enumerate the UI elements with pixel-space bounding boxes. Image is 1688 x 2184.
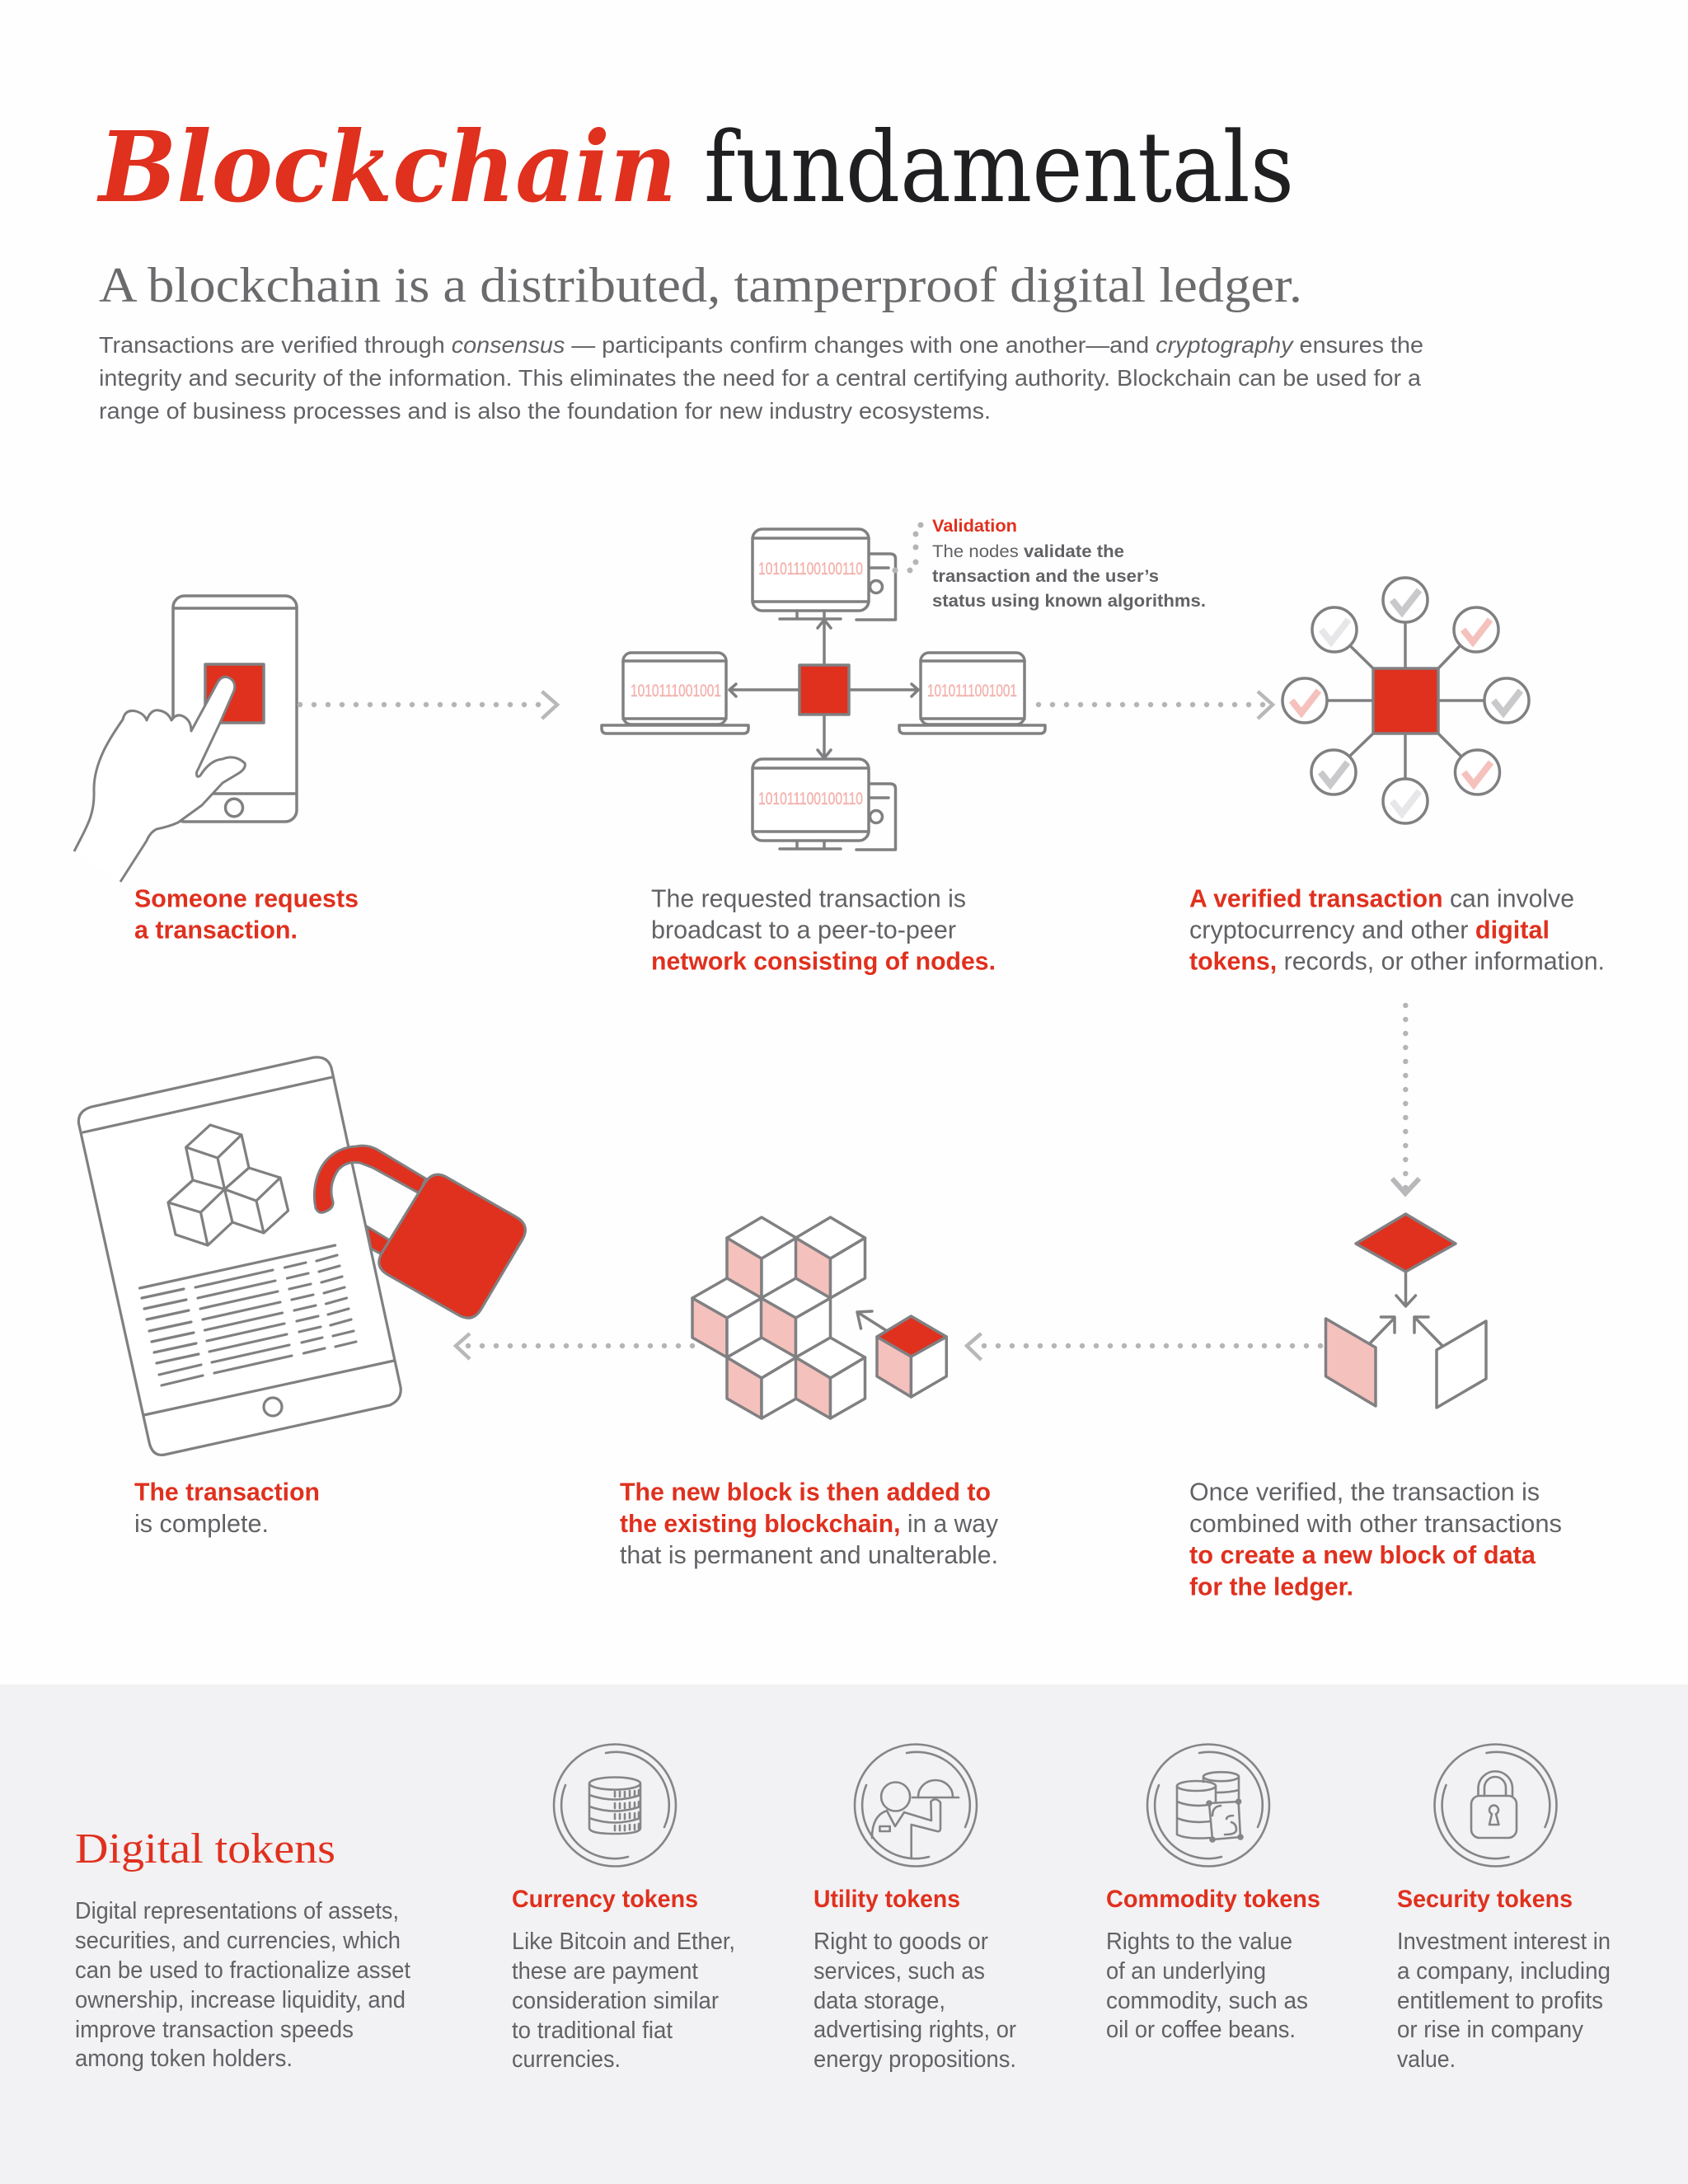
column: currency tokens: Currency tokens xyxy=(512,1886,698,1913)
column: currency tokens: to traditional fiat xyxy=(512,2018,673,2044)
icon: verification hub xyxy=(1282,578,1529,823)
step text: broadcast: network consisting of nodes. xyxy=(651,947,996,976)
step text: verified transaction: tokens, records, or other information. xyxy=(1189,947,1605,976)
top desktop computer: 101011100100110 xyxy=(758,560,863,579)
text: digital tokens description: securities, and currencies, which xyxy=(75,1928,401,1954)
subtitle: A blockchain is a distributed, tamperproof digital ledger. xyxy=(99,258,1302,312)
column: utility tokens: Right to goods or xyxy=(814,1929,988,1955)
padlock xyxy=(314,1146,525,1318)
step text: new block added: the existing blockchain, in a way xyxy=(620,1509,998,1538)
column: currency tokens: Like Bitcoin and Ether, xyxy=(512,1929,735,1955)
column: utility tokens: data storage, xyxy=(814,1988,945,2014)
callout: validation xyxy=(892,516,1206,611)
top desktop computer xyxy=(753,529,895,620)
icon: tablet with padlock xyxy=(78,1057,525,1455)
step text: broadcast: The requested transaction is xyxy=(651,884,966,913)
step text: new block added: The new block is then added to xyxy=(620,1478,991,1507)
network diagram xyxy=(602,529,1045,850)
column: commodity tokens: commodity, such as xyxy=(1106,1988,1308,2014)
intro paragraph: integrity and security of the information. This eliminates the need for a central certifying authority. Blockchain can be used for a xyxy=(99,365,1421,391)
callout: validation: status using known algorithms. xyxy=(932,591,1206,611)
column: security tokens: Investment interest in xyxy=(1397,1929,1611,1955)
icon: utility tokens waiter xyxy=(855,1744,977,1866)
icon: currency tokens xyxy=(554,1744,676,1866)
icon: commodity tokens xyxy=(1147,1744,1269,1866)
column: security tokens: entitlement to profits xyxy=(1397,1988,1603,2014)
text: digital tokens description: among token holders. xyxy=(75,2046,293,2072)
central node xyxy=(799,665,849,715)
left laptop xyxy=(602,653,748,733)
column: utility tokens: Utility tokens xyxy=(814,1886,960,1913)
column: security tokens: a company, including xyxy=(1397,1958,1611,1985)
icon: block assembling xyxy=(1325,1214,1486,1408)
column: currency tokens: currencies. xyxy=(512,2046,621,2073)
column: utility tokens: services, such as xyxy=(814,1958,985,1985)
network arrows xyxy=(729,620,918,758)
column: commodity tokens xyxy=(1106,1886,1320,2043)
column: security tokens: or rise in company xyxy=(1397,2017,1584,2043)
column: security tokens: Security tokens xyxy=(1397,1886,1573,1913)
column: security tokens xyxy=(1397,1886,1611,2073)
arrow: network to verification xyxy=(1039,691,1273,719)
icon: phone with tapping hand xyxy=(74,596,297,882)
arrow: verified to new block xyxy=(1392,1005,1419,1193)
right laptop: 1010111001001 xyxy=(927,682,1017,701)
text: digital tokens description: Digital representations of assets, xyxy=(75,1898,399,1924)
step text: verified transaction xyxy=(1189,884,1605,976)
step text: combined into block: for the ledger. xyxy=(1189,1572,1353,1601)
title: Blockchain xyxy=(96,110,677,224)
intro paragraph xyxy=(99,332,1423,424)
step text: someone requests: Someone requests xyxy=(134,884,359,913)
right laptop xyxy=(899,653,1045,733)
column: currency tokens: consideration similar xyxy=(512,1988,719,2014)
text: digital tokens description: can be used to fractionalize asset xyxy=(75,1957,410,1984)
column: utility tokens: energy propositions. xyxy=(814,2046,1016,2073)
column: commodity tokens: oil or coffee beans. xyxy=(1106,2017,1296,2043)
text: digital tokens description xyxy=(75,1898,410,2072)
step text: someone requests xyxy=(134,884,359,944)
text: digital tokens description: improve transaction speeds xyxy=(75,2017,354,2043)
callout: validation: Validation xyxy=(932,516,1017,536)
step text: combined into block xyxy=(1189,1478,1562,1601)
column: commodity tokens: Commodity tokens xyxy=(1106,1886,1320,1913)
step text: broadcast: broadcast to a peer-to-peer xyxy=(651,915,956,944)
step text: new block added: that is permanent and unalterable. xyxy=(620,1540,998,1569)
text: digital tokens description: ownership, increase liquidity, and xyxy=(75,1987,406,2013)
arrow: blockchain to complete xyxy=(456,1333,692,1359)
callout: validation: transaction and the user’s xyxy=(932,566,1159,586)
arrow: new block to blockchain xyxy=(967,1333,1320,1360)
step text: someone requests: a transaction. xyxy=(134,915,298,944)
intro paragraph: Transactions are verified through consensus — participants confirm changes with one another—and cryptography ensures the xyxy=(99,332,1423,358)
title xyxy=(96,110,1294,224)
new cube with arrow xyxy=(857,1311,946,1397)
column: currency tokens: these are payment xyxy=(512,1958,698,1985)
step text: combined into block: combined with other transactions xyxy=(1189,1509,1562,1538)
bottom desktop computer: 101011100100110 xyxy=(758,790,863,808)
icon: blockchain cubes xyxy=(692,1217,946,1418)
column: currency tokens xyxy=(512,1886,735,2073)
heading: digital tokens: Digital tokens xyxy=(75,1825,335,1872)
arrow: phone to network xyxy=(300,691,557,719)
bottom desktop computer xyxy=(753,759,895,850)
title: fundamentals xyxy=(704,110,1294,224)
step text: combined into block: to create a new block of data xyxy=(1189,1540,1536,1569)
step text: broadcast xyxy=(651,884,996,976)
panel: digital tokens xyxy=(0,1685,1688,2184)
icon: security tokens lock xyxy=(1434,1744,1556,1866)
column: utility tokens: advertising rights, or xyxy=(814,2017,1016,2043)
step text: transaction complete xyxy=(134,1478,320,1538)
step text: verified transaction: cryptocurrency and other digital xyxy=(1189,915,1550,944)
column: utility tokens xyxy=(814,1886,1016,2073)
column: commodity tokens: of an underlying xyxy=(1106,1958,1266,1985)
callout: validation: The nodes validate the xyxy=(932,541,1124,561)
step text: transaction complete: is complete. xyxy=(134,1509,269,1538)
step text: transaction complete: The transaction xyxy=(134,1478,320,1507)
intro paragraph: range of business processes and is also the foundation for new industry ecosystems. xyxy=(99,398,991,424)
step text: combined into block: Once verified, the transaction is xyxy=(1189,1478,1540,1507)
step text: verified transaction: A verified transaction can involve xyxy=(1189,884,1574,913)
left laptop: 1010111001001 xyxy=(631,682,721,701)
step text: new block added xyxy=(620,1478,998,1569)
column: commodity tokens: Rights to the value xyxy=(1106,1929,1292,1955)
column: security tokens: value. xyxy=(1397,2046,1456,2073)
